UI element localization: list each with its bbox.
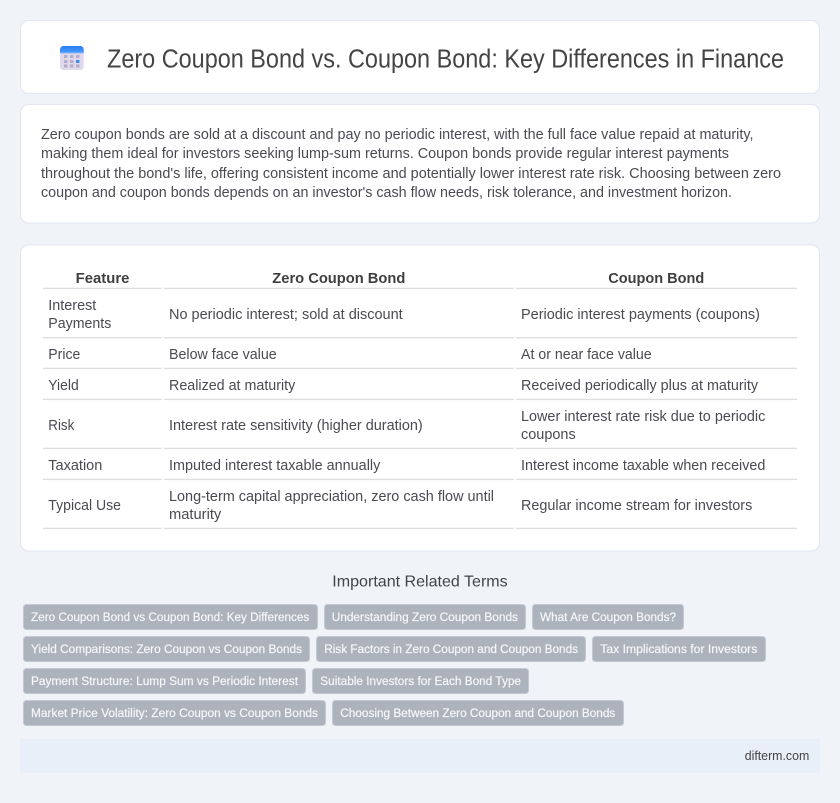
table row: yield: Realized at maturity [169,378,296,394]
text block: introduction paragraph: making them ideal for investors seeking lump-sum returns. Coupon bonds provide regular interest payments [41,146,729,162]
table row: risk: Interest rate sensitivity (higher duration) [169,418,423,434]
table row: price [43,347,797,369]
text block: introduction paragraph: throughout the bond's life, offering consistent income and potentially lower interest rate risk. Choosing between zero [41,166,781,182]
table row: price: Price [48,347,80,363]
text block: introduction paragraph [41,127,781,201]
tag: Market Price Volatility: Zero Coupon vs Coupon Bonds [31,706,318,720]
table header row: Coupon Bond [608,271,704,287]
tag [24,604,318,630]
tag: Risk Factors in Zero Coupon and Coupon Bonds [324,642,578,656]
tag [324,604,526,630]
panel: related term tags [24,604,766,726]
table row: interest payments: No periodic interest; sold at discount [169,307,403,323]
tag [24,636,310,662]
table row: typical use: Long-term capital appreciation, zero cash flow until [169,489,494,505]
table row: interest payments: Interest [48,298,96,314]
table row: taxation: Taxation [48,458,102,474]
panel: comparison table [20,245,820,551]
tag: Suitable Investors for Each Bond Type [320,674,521,688]
footer bar [20,739,820,773]
table row: interest payments: Payments [48,316,111,332]
table row: interest payments [43,298,797,338]
table row: taxation: Interest income taxable when received [521,458,765,474]
table row: yield: Yield [48,378,79,394]
table row: typical use: Regular income stream for investors [521,498,752,514]
panel: title header [20,20,820,94]
table header row: Zero Coupon Bond [272,271,405,287]
tag: Understanding Zero Coupon Bonds [332,610,518,624]
tag: Yield Comparisons: Zero Coupon vs Coupon Bonds [31,642,302,656]
table row: yield [43,378,797,400]
tag [332,700,624,726]
table row: risk: Risk [48,418,75,434]
heading: important related terms: Important Related Terms [332,574,508,590]
icon: calendar [60,46,84,70]
table header row [43,271,797,289]
tag [532,604,684,630]
table row: yield: Received periodically plus at maturity [521,378,759,394]
tag [312,668,528,694]
table row: price: At or near face value [521,347,652,363]
tag [24,700,326,726]
table row: risk [43,409,797,449]
tag [316,636,586,662]
table row: taxation [43,458,797,480]
tag [24,668,306,694]
table row: typical use [43,489,797,529]
text block: introduction paragraph: coupon and coupon bonds depends on an investor's cash flow needs, risk tolerance, and investment horizon. [41,185,732,201]
table row: risk: coupons [521,427,576,443]
text block: introduction paragraph: Zero coupon bonds are sold at a discount and pay no periodic interest, with the full face value repaid at maturity, [41,127,754,143]
footer site name: difterm.com [745,748,809,763]
title: Zero Coupon Bond vs. Coupon Bond: Key Differences in Finance [107,46,784,74]
panel: introduction [20,104,820,223]
tag: Choosing Between Zero Coupon and Coupon Bonds [340,706,615,720]
tag: Tax Implications for Investors [600,642,757,656]
table row: taxation: Imputed interest taxable annually [169,458,381,474]
tag [592,636,766,662]
table row: typical use: maturity [169,507,222,523]
table row: risk: Lower interest rate risk due to periodic [521,409,765,425]
tag: Payment Structure: Lump Sum vs Periodic Interest [31,674,299,688]
table row: typical use: Typical Use [48,498,121,514]
table row: price: Below face value [169,347,277,363]
table header row: Feature [76,271,129,287]
table row: interest payments: Periodic interest payments (coupons) [521,307,760,323]
tag: Zero Coupon Bond vs Coupon Bond: Key Differences [31,610,309,624]
tag: What Are Coupon Bonds? [540,610,676,624]
